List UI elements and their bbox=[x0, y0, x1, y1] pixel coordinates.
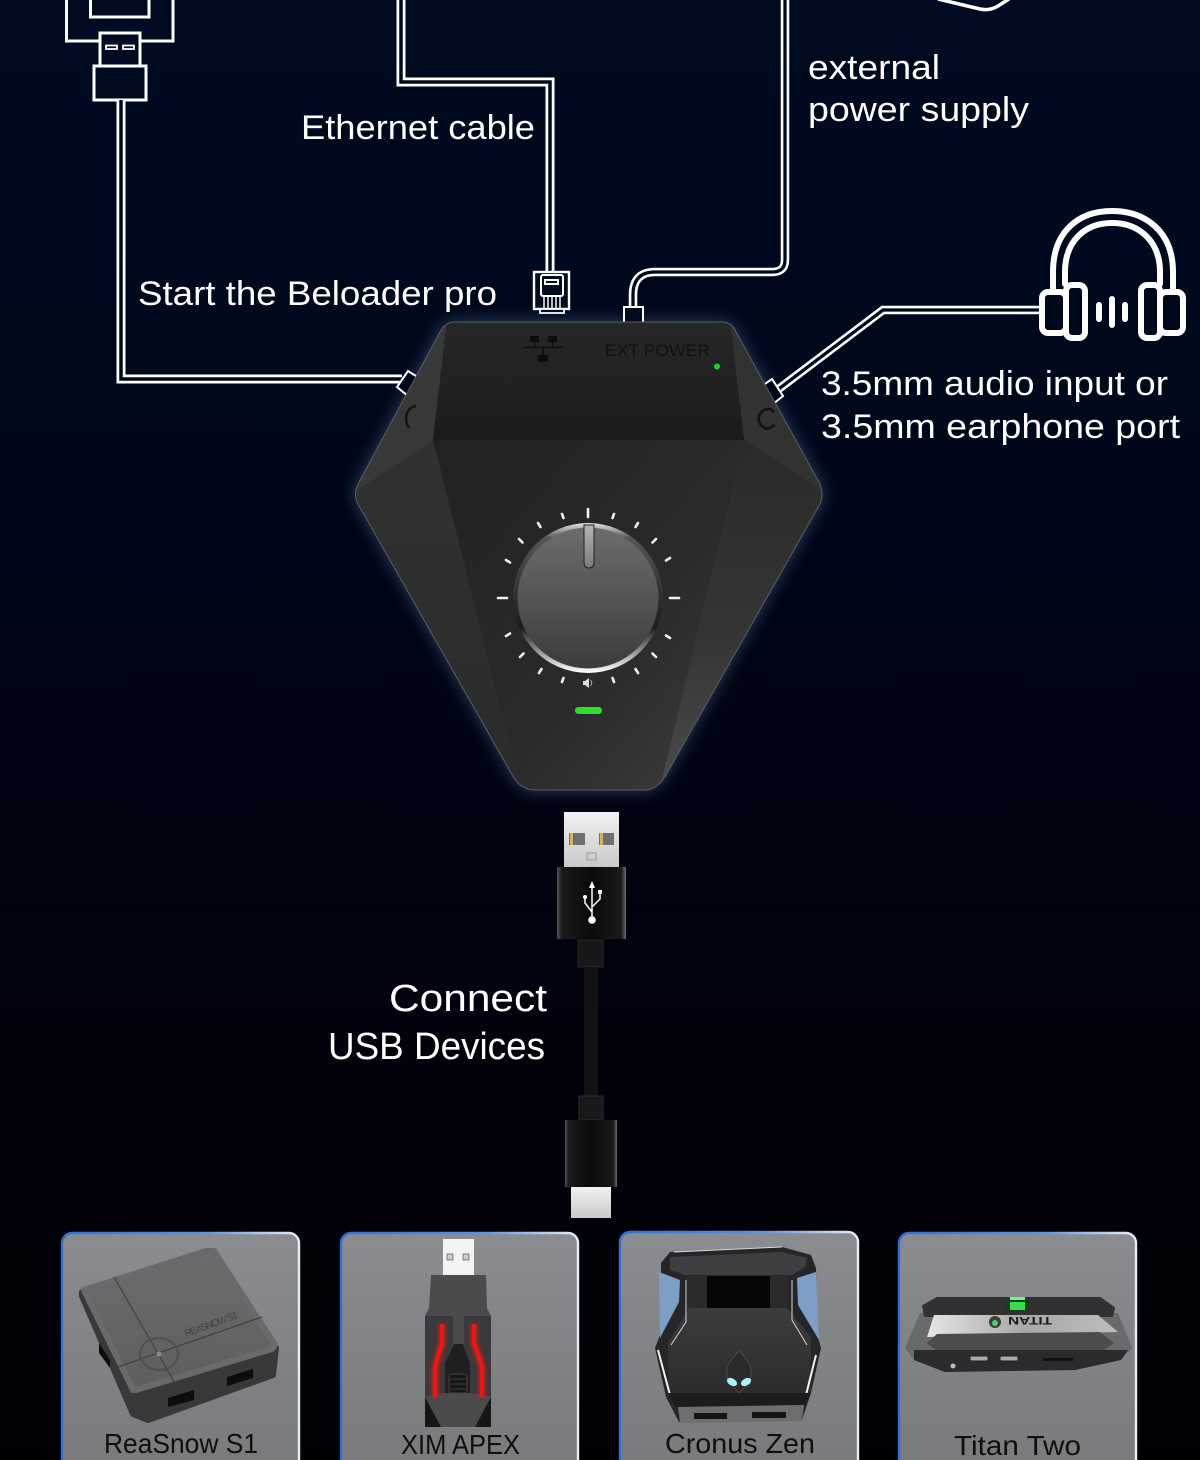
device: reasnow: REASNOW S1 bbox=[183, 1310, 240, 1340]
facet: centre bbox=[433, 440, 689, 790]
label: start the beloader pro: Start the Beloader pro bbox=[138, 275, 497, 313]
facet: right lower bbox=[662, 584, 772, 780]
device glow bbox=[356, 322, 822, 790]
device: titan two bbox=[905, 1297, 1132, 1372]
knob ticks bbox=[498, 509, 679, 682]
connector: left jack bbox=[397, 371, 419, 396]
icon: ethernet plug bbox=[534, 272, 569, 313]
usb-a hood bbox=[557, 867, 626, 939]
card label: Cronus Zen bbox=[665, 1428, 815, 1459]
device: reasnow bbox=[82, 1251, 276, 1420]
facet: left lower bbox=[350, 440, 524, 800]
usb plug cable bbox=[557, 812, 626, 1218]
icon: mic jack left bbox=[406, 406, 416, 428]
strain relief lower bbox=[579, 1096, 603, 1120]
usb-c metal bbox=[571, 1187, 611, 1218]
label: external power supply: power supply bbox=[808, 91, 1029, 129]
usb-c hood bbox=[565, 1120, 617, 1187]
card: ReaSnow S1 bbox=[62, 1233, 299, 1460]
label: ethernet cable: Ethernet cable bbox=[301, 109, 535, 147]
icon: headset jack right bbox=[759, 408, 775, 429]
label: external power supply bbox=[808, 49, 1029, 129]
power led bbox=[714, 364, 720, 370]
connector: right jack bbox=[762, 379, 783, 404]
cable: ethernet bbox=[401, 0, 550, 272]
facet: left upper bbox=[356, 326, 446, 490]
strain relief upper bbox=[578, 940, 603, 967]
cable: usb to device bbox=[121, 100, 402, 379]
card: Titan Two bbox=[899, 1233, 1136, 1460]
facet: right upper bbox=[730, 320, 830, 495]
cable: external power bbox=[633, 0, 785, 308]
label: external power supply: external bbox=[808, 49, 940, 87]
label: connect usb devices: Connect bbox=[389, 978, 547, 1020]
label: audio port bbox=[821, 365, 1181, 446]
label: audio port: 3.5mm audio input or bbox=[821, 365, 1168, 403]
cable core bbox=[584, 967, 598, 1097]
device: cronus zen bbox=[655, 1247, 821, 1423]
cable: headphone bbox=[776, 310, 1042, 391]
icon: headphones bbox=[1042, 211, 1183, 338]
card: XIM APEX bbox=[341, 1233, 578, 1460]
connector: power bbox=[624, 307, 643, 323]
status led bbox=[575, 707, 602, 714]
device: titan two: TITAN bbox=[1008, 1314, 1052, 1326]
card: Cronus Zen bbox=[620, 1232, 858, 1460]
label: audio port: 3.5mm earphone port bbox=[821, 408, 1181, 446]
card label: XIM APEX bbox=[401, 1429, 520, 1460]
usb-a metal bbox=[564, 812, 619, 867]
volume knob bbox=[498, 509, 679, 682]
card label: ReaSnow S1 bbox=[104, 1428, 258, 1459]
facet: top panel bbox=[433, 370, 744, 440]
icon: network symbol bbox=[524, 336, 563, 362]
icon: usb outline at top left bbox=[66, 0, 173, 100]
power adapter corner bbox=[938, 0, 1009, 10]
device: xim apex bbox=[425, 1239, 491, 1427]
label: connect usb devices bbox=[328, 978, 547, 1068]
icon: usb trident bbox=[583, 881, 602, 924]
knob pointer bbox=[584, 525, 594, 568]
label: connect usb devices: USB Devices bbox=[328, 1026, 545, 1068]
device body bbox=[355, 322, 822, 790]
label: ext power: EXT POWER bbox=[605, 341, 710, 360]
icon: speaker bbox=[583, 678, 592, 688]
